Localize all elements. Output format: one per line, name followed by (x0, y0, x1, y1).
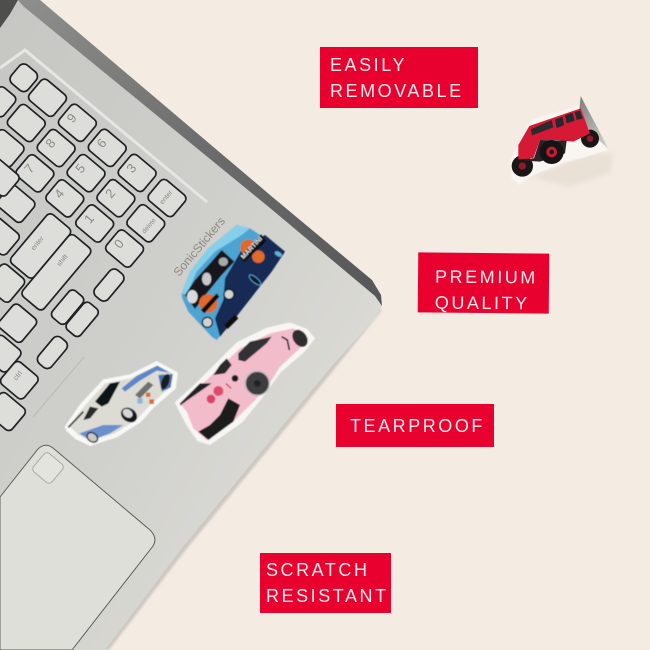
key: left partial (0, 157, 21, 198)
key: ctrl: ctrl (13, 370, 24, 382)
sticker: white and blue car (65, 361, 178, 446)
label: tearproof: TEARPROOF (350, 416, 485, 436)
windows (95, 382, 120, 407)
key: ctrl (0, 359, 40, 401)
label: easily removable: EASILY (330, 55, 407, 75)
key: 3: 3 (123, 161, 139, 176)
label: tearproof (336, 404, 494, 447)
orange lights (146, 393, 150, 397)
sticker: red jeep peeling (510, 96, 613, 187)
windows (531, 120, 553, 135)
key: arrow pair (49, 288, 100, 339)
navy front (215, 235, 285, 337)
key: lower arrow (35, 334, 70, 371)
key: lower left (0, 302, 39, 344)
wheels behind (581, 130, 599, 148)
front wheel (540, 140, 564, 164)
brand text: SonicStickers (171, 214, 228, 279)
martini badge (240, 234, 266, 262)
key: slash (0, 183, 37, 224)
trackpad (0, 445, 155, 650)
key: left partial two (0, 216, 21, 257)
laptop body (0, 0, 382, 650)
top-left dark corner (0, 0, 18, 28)
key: plus (0, 128, 26, 169)
laptop edge shadow (100, 308, 382, 650)
key: enter: enter (159, 189, 175, 206)
soft shadow (530, 153, 613, 187)
key: slash top (0, 85, 18, 119)
key: 9: 9 (64, 110, 80, 126)
key: 5: 5 (72, 161, 88, 176)
hood detail (135, 382, 153, 398)
taillights (213, 386, 223, 396)
windscreen (238, 337, 272, 362)
key: minus (5, 102, 47, 144)
light roof (182, 225, 250, 295)
key: page (27, 77, 68, 118)
plate (224, 314, 238, 329)
key: 0 (104, 228, 146, 269)
keyboard well (0, 50, 207, 417)
key: enter (146, 177, 188, 219)
key: 2 (95, 178, 137, 219)
label: scratch resistant (260, 553, 391, 613)
key: up arrow (92, 267, 126, 304)
key: 7 (14, 153, 56, 194)
sticker: blue martini van (182, 225, 285, 340)
key: 2: 2 (102, 186, 118, 201)
rear wing (180, 383, 212, 406)
key: right shift: shift (56, 253, 70, 268)
white halo (510, 105, 609, 185)
key: 6: 6 (93, 135, 110, 151)
rear wheel (289, 327, 311, 350)
key: 0: 0 (111, 236, 127, 251)
label: scratch resistant: SCRATCH (266, 560, 370, 580)
key: 3 (116, 152, 158, 194)
sticker: pink car (175, 322, 315, 445)
wheels (118, 405, 140, 425)
key: partial lower (0, 333, 23, 374)
key: 4: 4 (51, 186, 67, 201)
orange roundels (240, 239, 256, 255)
red body (518, 108, 590, 159)
key: top zero (8, 62, 40, 94)
window highlights (187, 290, 198, 303)
headlights (224, 289, 234, 299)
hinge dark band (18, 0, 382, 306)
key: 8: 8 (42, 136, 58, 151)
key: bottom partial (0, 391, 27, 433)
key: main enter (9, 212, 73, 280)
car body (69, 366, 173, 441)
key: left of shift (0, 262, 27, 304)
key: 7: 7 (21, 161, 37, 176)
side vent (248, 273, 262, 287)
van body (182, 225, 285, 340)
label: easily removable: REMOVABLE (330, 81, 464, 101)
label: premium quality: QUALITY (435, 293, 530, 313)
key: 1 (74, 203, 116, 244)
laptop (0, 0, 382, 650)
label: scratch resistant: RESISTANT (266, 586, 389, 606)
lower skirt (198, 398, 240, 440)
key: 5 (65, 153, 107, 194)
side window (213, 358, 232, 375)
white border (65, 361, 178, 446)
keyboard keys (0, 59, 199, 433)
front wheel (245, 371, 269, 395)
label: easily removable (320, 47, 478, 108)
peeled corner (579, 96, 609, 149)
key: 4 (44, 178, 86, 219)
blue stripes (122, 366, 170, 392)
dark window frames (185, 250, 234, 309)
pink body (180, 328, 308, 440)
key: 1: 1 (81, 211, 97, 226)
key: period: delete (141, 217, 158, 235)
fingerprint square (31, 451, 65, 485)
key: 9 (56, 102, 98, 143)
white border (175, 322, 315, 445)
key: right shift (20, 233, 93, 312)
label: premium quality (418, 252, 549, 314)
key: 8 (35, 127, 77, 169)
sticker: blue martini van: MARTINI (240, 236, 264, 261)
black lower (523, 140, 567, 162)
key: period (125, 203, 167, 244)
key: 6 (86, 127, 128, 168)
label: premium quality: PREMIUM (435, 267, 538, 287)
key: main enter: enter (30, 235, 46, 252)
